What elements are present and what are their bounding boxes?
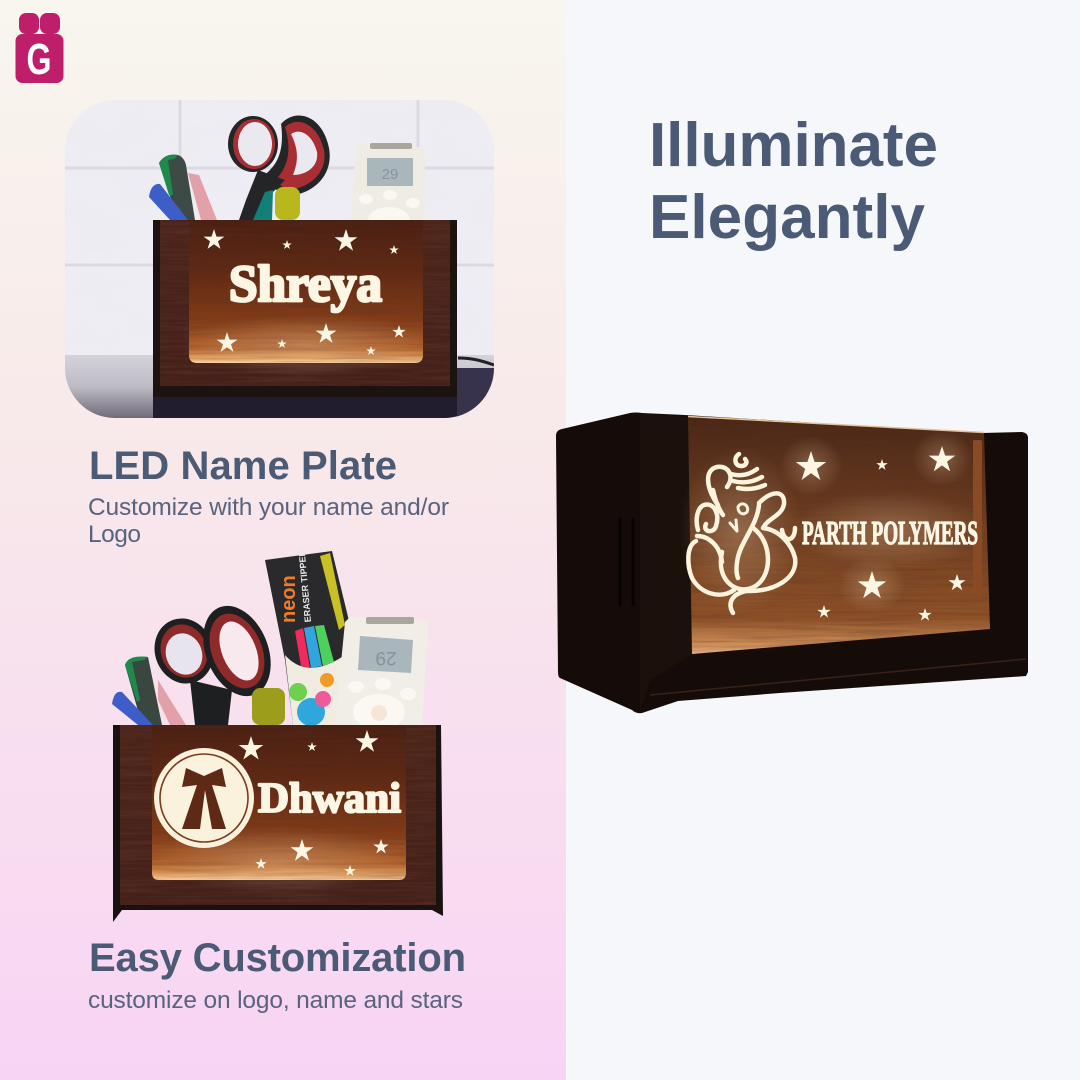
name text: Dhwani: Dhwani [258,776,401,822]
stars [204,229,406,355]
panel: Shreya product photo [65,100,494,418]
stars [796,446,966,621]
icon: remote control: 29 [375,647,397,668]
right background panel [566,0,1080,1080]
icon: pens [149,155,217,220]
panel: Dhwani product [112,549,443,922]
left pastel background panel [0,0,566,1080]
icon: pens [112,657,186,725]
logo: gift box G [16,13,64,84]
heading: Easy Customization: Easy Customization [89,936,466,980]
icon: scissors [145,596,285,725]
text block: customization description: customize on logo, name and stars [88,987,463,1014]
icon: advocate emblem [154,748,254,848]
heading: LED Name Plate: LED Name Plate [89,444,397,488]
icon: remote control: 29 [382,166,398,183]
stars [239,730,389,876]
icon: neon pencil box [265,549,350,726]
icon: scissors [228,116,330,220]
icon: Ganesha emblem [688,454,795,613]
title: Illuminate Elegantly: Elegantly [649,183,926,252]
logo: gift box G: G [26,35,52,84]
panel: Parth Polymers illuminated box [556,412,1028,713]
icon: remote control [351,143,425,220]
name text: Shreya: Shreya [229,256,382,313]
wooden organizer box [153,220,457,397]
text block: LED description: Customize with your name and/or [88,494,449,521]
text block: LED description: Logo [88,521,141,548]
icon: neon pencil box: ERASER TIPPED [297,549,313,623]
icon: remote control [335,617,428,730]
wooden organizer box [113,725,443,922]
title: Illuminate Elegantly: Illuminate [649,111,938,180]
icon: neon pencil box: neon [278,575,300,623]
